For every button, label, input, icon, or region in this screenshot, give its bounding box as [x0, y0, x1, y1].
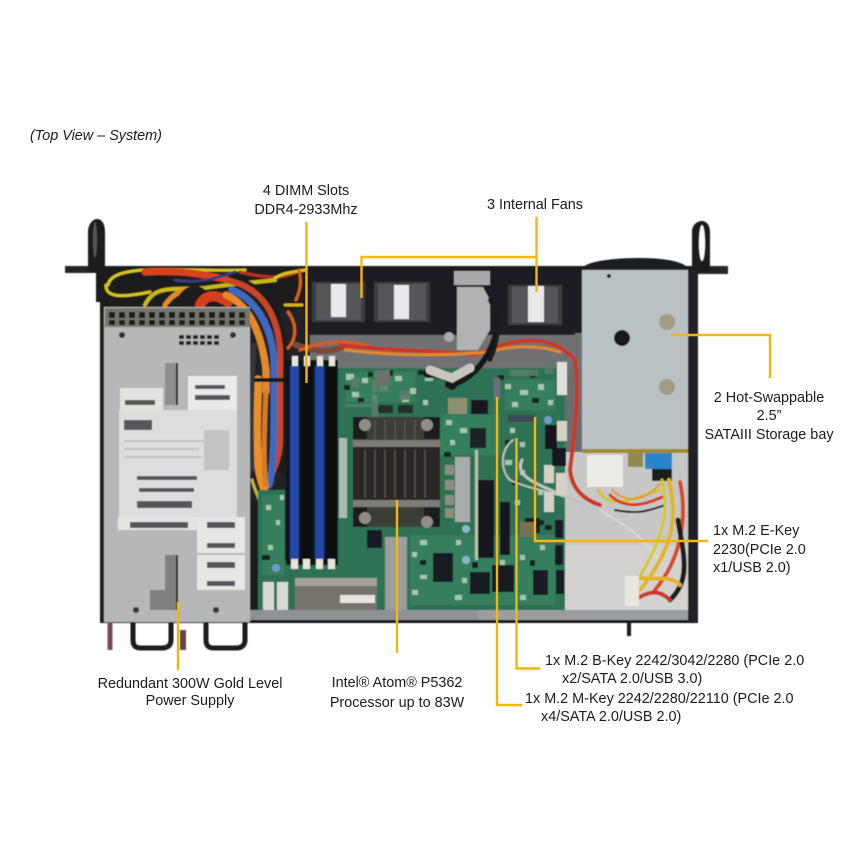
title: (Top View – System)	[30, 128, 162, 144]
fan 3	[508, 285, 562, 325]
label: E-key: 1x M.2 E-Key	[713, 523, 800, 539]
storage bay	[582, 258, 688, 453]
leader: B-key	[516, 438, 540, 668]
power supply handles	[110, 622, 245, 650]
CPU heatsink	[353, 417, 440, 528]
leader: E-key	[535, 417, 708, 541]
leader: storage bay	[671, 335, 770, 378]
label: processor: Processor up to 83W	[330, 695, 465, 711]
rear IO ports	[263, 537, 407, 610]
label: storage bay: SATAIII Storage bay	[704, 427, 834, 443]
label: E-key: x1/USB 2.0)	[713, 560, 791, 576]
memory DIMM slots	[286, 356, 347, 569]
product labels	[118, 376, 245, 590]
label: E-key: 2230(PCIe 2.0	[713, 542, 806, 558]
label: DIMM slots: 4 DIMM Slots	[263, 183, 349, 199]
fan bracket	[444, 271, 490, 350]
label: processor: Intel® Atom® P5362	[332, 675, 462, 691]
leader: processor	[396, 500, 398, 653]
server photo	[65, 219, 728, 650]
leader: power supply	[177, 602, 179, 670]
fan 2	[374, 282, 430, 322]
right handle and flange	[688, 221, 728, 302]
leader: M-key	[497, 397, 522, 705]
leader: internal fans	[362, 217, 536, 298]
release latch	[150, 555, 178, 610]
label: storage bay: 2.5”	[757, 408, 782, 424]
power supply	[103, 307, 250, 622]
onboard connectors and heat fins	[272, 362, 567, 595]
cooling fans	[305, 271, 575, 350]
power supply cables	[106, 270, 372, 540]
label: internal fans: 3 Internal Fans	[487, 197, 583, 213]
label: B-key: x2/SATA 2.0/USB 3.0)	[562, 671, 702, 687]
label: storage bay: 2 Hot-Swappable	[714, 390, 824, 406]
chassis interior	[100, 266, 698, 623]
leader: DIMM slots	[305, 222, 308, 383]
internal wiring	[340, 300, 660, 560]
label: M-key: x4/SATA 2.0/USB 2.0)	[541, 709, 681, 725]
label: power supply: Redundant 300W Gold Level	[98, 676, 282, 692]
drive bay connectors and power wiring	[587, 453, 684, 606]
label: M-key: 1x M.2 M-Key 2242/2280/22110 (PCIe 2.0	[525, 691, 794, 707]
left handle and flange	[65, 219, 105, 302]
label: power supply: Power Supply	[146, 693, 235, 709]
label: B-key: 1x M.2 B-Key 2242/3042/2280 (PCIe 2.0	[545, 653, 804, 669]
fan 1	[312, 282, 365, 322]
label: DIMM slots: DDR4-2933Mhz	[254, 202, 358, 218]
callout lines	[178, 217, 770, 705]
chassis front rail	[100, 270, 698, 636]
motherboard	[258, 362, 565, 610]
